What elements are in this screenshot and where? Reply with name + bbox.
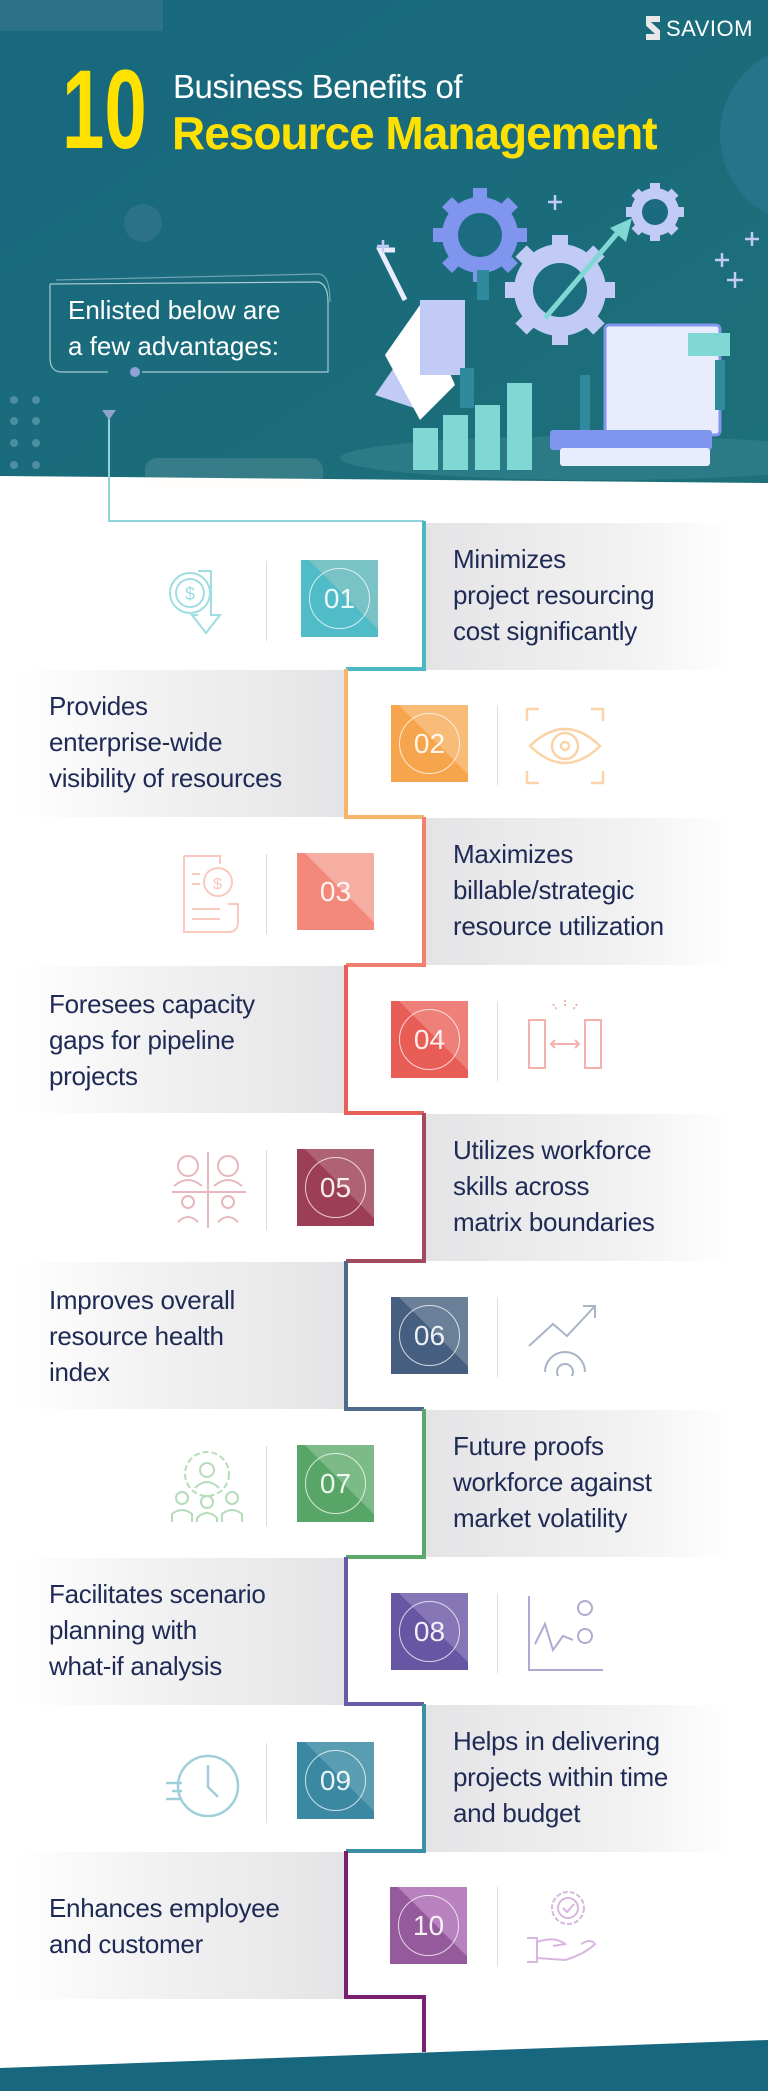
row 06 xyxy=(49,1285,596,1387)
text 09: projects within time xyxy=(453,1762,668,1792)
row 08 xyxy=(49,1579,603,1681)
title: Business Benefits of xyxy=(173,68,462,105)
text 01: Minimizes xyxy=(453,544,566,574)
text 08: planning with xyxy=(49,1615,197,1645)
connector line xyxy=(102,410,426,2052)
number box 09 xyxy=(297,1742,374,1819)
text 07: workforce against xyxy=(453,1467,652,1497)
text 07: Future proofs xyxy=(453,1431,604,1461)
text 07 xyxy=(453,1431,652,1533)
row 02 xyxy=(49,691,604,793)
text 10 xyxy=(49,1893,280,1959)
text 08 xyxy=(49,1579,266,1681)
row 07 xyxy=(171,1431,652,1533)
icon: invoice xyxy=(183,855,239,933)
icon: clock xyxy=(166,1754,240,1818)
text 04: projects xyxy=(49,1061,138,1091)
text 09 xyxy=(453,1726,668,1828)
row backgrounds xyxy=(424,523,768,670)
illustration: teamwork gears xyxy=(375,183,759,470)
text 04 xyxy=(49,989,255,1091)
text 05: Utilizes workforce xyxy=(453,1135,651,1165)
text 02 xyxy=(49,691,282,793)
number box 01: 01 xyxy=(324,583,355,614)
icon: what-if chart xyxy=(528,1596,603,1671)
icon: dollar down xyxy=(169,570,222,634)
text 08: Facilitates scenario xyxy=(49,1579,266,1609)
number box 07 xyxy=(297,1445,374,1522)
icon: capacity gap xyxy=(528,1000,602,1069)
number box 10: 10 xyxy=(413,1910,444,1941)
callout: enlisted below xyxy=(49,273,331,377)
text 06: Improves overall xyxy=(49,1285,235,1315)
icon: workforce matrix xyxy=(172,1152,246,1228)
number box 04 xyxy=(391,1001,468,1078)
text 01 xyxy=(453,544,654,646)
number box 08 xyxy=(391,1593,468,1670)
number box 09: 09 xyxy=(320,1765,351,1796)
text 02: enterprise-wide xyxy=(49,727,222,757)
row 10 xyxy=(49,1887,596,1967)
text 10: and customer xyxy=(49,1929,203,1959)
text 05 xyxy=(453,1135,655,1237)
number box 10 xyxy=(390,1887,467,1964)
row 01 xyxy=(169,544,654,646)
callout: enlisted below: Enlisted below are xyxy=(68,295,280,325)
header background xyxy=(0,0,768,483)
text 04: gaps for pipeline xyxy=(49,1025,235,1055)
title xyxy=(62,47,657,172)
icon: invoice: $ xyxy=(213,876,222,893)
text 01: cost significantly xyxy=(453,616,637,646)
number box 05: 05 xyxy=(320,1172,351,1203)
text 05: skills across xyxy=(453,1171,589,1201)
text 04: Foresees capacity xyxy=(49,989,255,1019)
text 03: billable/strategic xyxy=(453,875,634,905)
text 08: what-if analysis xyxy=(49,1651,222,1681)
row 09 xyxy=(166,1726,668,1828)
footer band xyxy=(0,2040,768,2091)
icon: eye xyxy=(526,708,604,784)
title: 10 xyxy=(62,47,147,172)
number box 04: 04 xyxy=(414,1024,445,1055)
number box 06 xyxy=(391,1297,468,1374)
text 10: Enhances employee xyxy=(49,1893,280,1923)
icon: team gear xyxy=(171,1451,243,1522)
text 02: Provides xyxy=(49,691,148,721)
text 06 xyxy=(49,1285,235,1387)
text 06: index xyxy=(49,1357,110,1387)
text 05: matrix boundaries xyxy=(453,1207,655,1237)
row 04 xyxy=(49,989,602,1091)
number box 05 xyxy=(297,1149,374,1226)
number box 03 xyxy=(297,853,374,930)
row 03 xyxy=(183,839,664,941)
icon: dollar down: $ xyxy=(185,584,195,604)
number box 01 xyxy=(301,560,378,637)
text 02: visibility of resources xyxy=(49,763,282,793)
text 07: market volatility xyxy=(453,1503,627,1533)
logo: SAVIOM: SAVIOM xyxy=(666,16,753,41)
callout: enlisted below: a few advantages: xyxy=(68,331,279,361)
text 01: project resourcing xyxy=(453,580,654,610)
text 03: resource utilization xyxy=(453,911,664,941)
icon: hand with badge xyxy=(527,1891,596,1963)
number box 07: 07 xyxy=(320,1468,351,1499)
icon: growth gear xyxy=(528,1305,596,1376)
title: Resource Management xyxy=(172,107,657,159)
row 05 xyxy=(172,1135,655,1237)
text 03: Maximizes xyxy=(453,839,573,869)
number box 02: 02 xyxy=(414,728,445,759)
number box 08: 08 xyxy=(414,1616,445,1647)
text 03 xyxy=(453,839,664,941)
text 09: Helps in delivering xyxy=(453,1726,660,1756)
number box 03: 03 xyxy=(320,876,351,907)
text 06: resource health xyxy=(49,1321,224,1351)
number box 02 xyxy=(391,705,468,782)
number box 06: 06 xyxy=(414,1320,445,1351)
text 09: and budget xyxy=(453,1798,580,1828)
